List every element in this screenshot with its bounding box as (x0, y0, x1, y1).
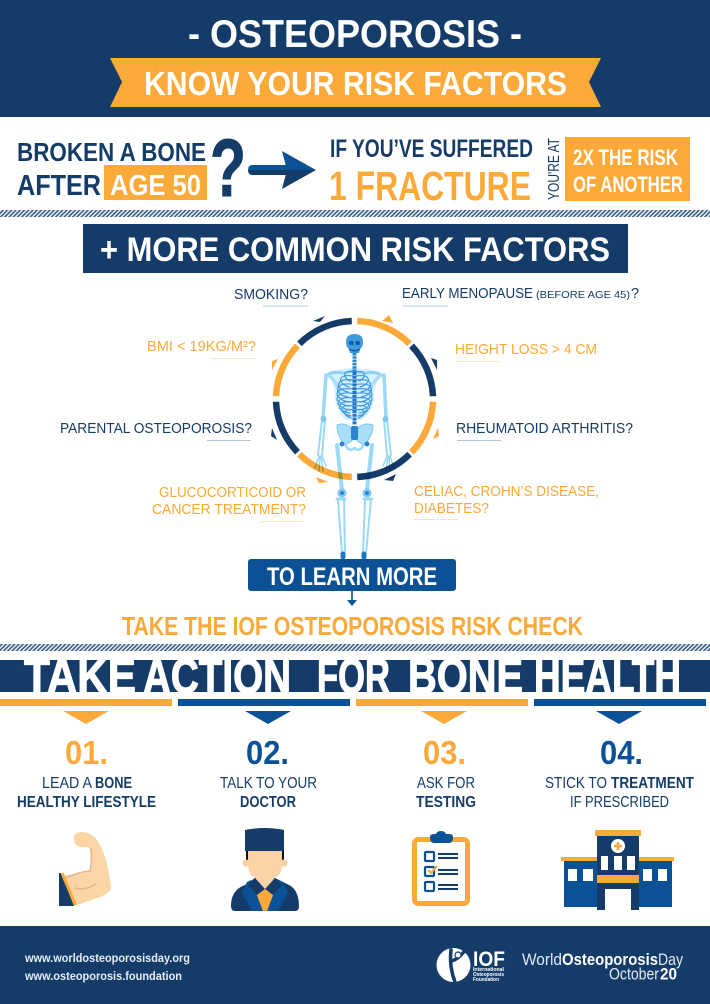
step 1 (0, 699, 172, 811)
spine (352, 353, 356, 372)
step 1: LEAD A (42, 775, 92, 792)
risk factor: rheumatoid arthritis: RHEUMATOID ARTHRITIS? (456, 421, 633, 437)
step 4: STICK TO (545, 775, 607, 792)
take action banner: BONE (408, 650, 523, 704)
fracture statement (329, 135, 533, 209)
risk factor: celiac, crohn's, diabetes: DIABETES? (414, 501, 489, 517)
arms (315, 375, 394, 471)
step 1: HEALTHY LIFESTYLE (17, 794, 156, 811)
step 4 (534, 699, 706, 811)
icon: hospital (561, 830, 674, 910)
step 1: 01. (65, 734, 108, 771)
icon: down arrow (347, 591, 357, 606)
ribbon: know your risk factors: KNOW YOUR RISK FACTORS (144, 65, 567, 102)
risk factor: height loss: HEIGHT LOSS > 4 CM (455, 342, 597, 358)
World Osteoporosis Day: 20 (660, 964, 677, 984)
website links (24, 951, 190, 983)
take action banner (0, 650, 710, 704)
icon: flexed arm (59, 832, 111, 906)
step 4: 04. (600, 734, 643, 771)
broken bone question: BROKEN A BONE (17, 137, 206, 167)
IOF logo: IOF (473, 948, 505, 971)
step 3: 03. (423, 734, 466, 771)
footer (0, 926, 710, 1004)
World Osteoporosis Day: Osteoporosis (562, 950, 658, 969)
ribcage right (356, 372, 372, 418)
IOF logo: Osteoporosis (473, 972, 504, 978)
risk factor: celiac, crohn's, diabetes (414, 484, 599, 520)
risk factor: glucocorticoid: GLUCOCORTICOID OR (159, 485, 306, 501)
IOF logo: International (473, 967, 505, 973)
heading: more common risk factors: + MORE COMMON RISK FACTORS (100, 231, 610, 269)
broken bone question (17, 123, 246, 214)
step 4: IF PRESCRIBED (570, 794, 669, 811)
risk factor: early menopause (402, 286, 639, 306)
icon: clipboard (414, 831, 468, 904)
skeleton (315, 334, 394, 557)
double risk callout: 2X THE RISK (573, 145, 678, 170)
step 3: ASK FOR (417, 775, 475, 792)
torso glow (329, 368, 380, 420)
risk factor: parental osteoporosis: PARENTAL OSTEOPOROSIS? (60, 421, 252, 437)
broken bone question: AGE 50 (110, 170, 201, 202)
fracture statement: IF YOU’VE SUFFERED (330, 135, 533, 163)
step 4: TREATMENT (611, 775, 694, 792)
take action banner: ACTION (143, 650, 291, 704)
double risk callout (546, 137, 690, 201)
IOF logo (436, 948, 505, 983)
broken bone question: AFTER (17, 170, 101, 202)
risk factor: glucocorticoid (152, 485, 306, 522)
risk factor: early menopause: (BEFORE AGE 45) (536, 289, 630, 301)
icon: arrow (248, 151, 316, 189)
shoulders (327, 370, 381, 375)
icon: doctor (231, 828, 299, 911)
risk factor: early menopause: EARLY MENOPAUSE (402, 286, 533, 302)
ring markers (271, 315, 439, 483)
pelvis (337, 424, 373, 445)
step 2: TALK TO YOUR (220, 775, 317, 792)
step 1: BONE (95, 775, 132, 792)
header band (0, 0, 710, 117)
take action banner: TAKE (24, 650, 136, 704)
step 2: 02. (246, 734, 289, 771)
World Osteoporosis Day: Day (658, 950, 683, 969)
risk factor: glucocorticoid: CANCER TREATMENT? (152, 502, 306, 518)
risk factor: early menopause: ? (631, 286, 639, 302)
take action banner: FOR (317, 650, 390, 704)
legs (337, 442, 372, 557)
risk factor: celiac, crohn's, diabetes: CELIAC, CROHN’S DISEASE, (414, 484, 599, 500)
step 3: TESTING (416, 794, 476, 811)
step 2: DOCTOR (240, 794, 296, 811)
skull (346, 334, 363, 353)
risk factor: BMI: BMI < 19KG/M²? (147, 339, 256, 355)
IOF logo: Foundation (473, 977, 499, 983)
step 2 (178, 699, 350, 811)
step 3 (356, 699, 528, 811)
ribbon: know your risk factors (110, 58, 601, 107)
risk check call to action: TAKE THE IOF OSTEOPOROSIS RISK CHECK (122, 611, 583, 641)
World Osteoporosis Day: World (522, 950, 562, 969)
World Osteoporosis Day (522, 950, 683, 984)
risk factor: smoking: SMOKING? (234, 287, 308, 303)
ribcage left (337, 372, 354, 418)
fracture statement: 1 FRACTURE (329, 163, 531, 209)
World Osteoporosis Day: October (609, 964, 659, 984)
title: - OSTEOPOROSIS - (188, 13, 522, 56)
button: to learn more: TO LEARN MORE (267, 563, 437, 591)
website links: www.worldosteoporosisday.org (24, 951, 190, 965)
broken bone question: ? (210, 123, 246, 214)
website links: www.osteoporosis.foundation (24, 969, 182, 983)
risk factor ring (276, 321, 433, 477)
double risk callout: YOU'RE AT (546, 138, 563, 200)
